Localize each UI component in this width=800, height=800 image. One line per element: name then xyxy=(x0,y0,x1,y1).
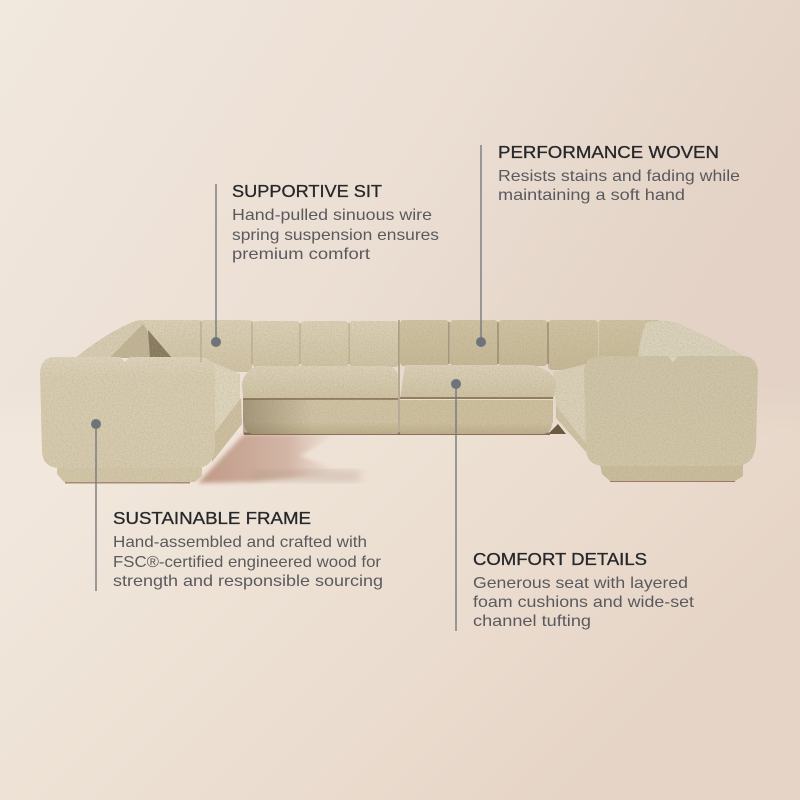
shade under left arm xyxy=(243,399,313,434)
callout: sustainable frame: FSC®-certified engineered wood for xyxy=(113,554,382,571)
callout: sustainable frame: SUSTAINABLE FRAME xyxy=(113,508,311,528)
callout: performance woven: maintaining a soft hand xyxy=(498,187,685,204)
seat fronts xyxy=(243,400,398,423)
right arm xyxy=(600,464,743,481)
callout: comfort details: foam cushions and wide-set xyxy=(473,594,695,611)
callout: comfort details xyxy=(451,379,695,631)
sofa xyxy=(40,320,758,484)
callout: sustainable frame: Hand-assembled and crafted with xyxy=(113,534,367,551)
callout: sustainable frame xyxy=(91,419,383,591)
seam shadows xyxy=(201,320,553,434)
callout: sustainable frame: strength and responsible sourcing xyxy=(113,573,383,590)
callout: comfort details: channel tufting xyxy=(473,613,591,630)
callout: supportive sit: SUPPORTIVE SIT xyxy=(232,181,382,201)
callout: performance woven xyxy=(476,142,740,347)
callout: comfort details: COMFORT DETAILS xyxy=(473,549,647,569)
callout: supportive sit: premium comfort xyxy=(232,246,371,263)
callout: performance woven: Resists stains and fading while xyxy=(498,168,740,185)
callout: supportive sit: Hand-pulled sinuous wire xyxy=(232,207,432,224)
center seat cushions xyxy=(242,366,398,399)
sofa upholstery xyxy=(40,320,758,482)
floor shadow xyxy=(65,424,735,484)
callout: supportive sit: spring suspension ensures xyxy=(232,227,439,244)
right return back xyxy=(638,321,748,358)
back cushions xyxy=(143,320,201,366)
callout: supportive sit xyxy=(211,181,439,347)
callout: performance woven: PERFORMANCE WOVEN xyxy=(498,142,719,162)
callout: comfort details: Generous seat with layered xyxy=(473,575,688,592)
left arm xyxy=(57,464,202,482)
inner side seats xyxy=(212,362,240,438)
left return back xyxy=(75,320,152,358)
